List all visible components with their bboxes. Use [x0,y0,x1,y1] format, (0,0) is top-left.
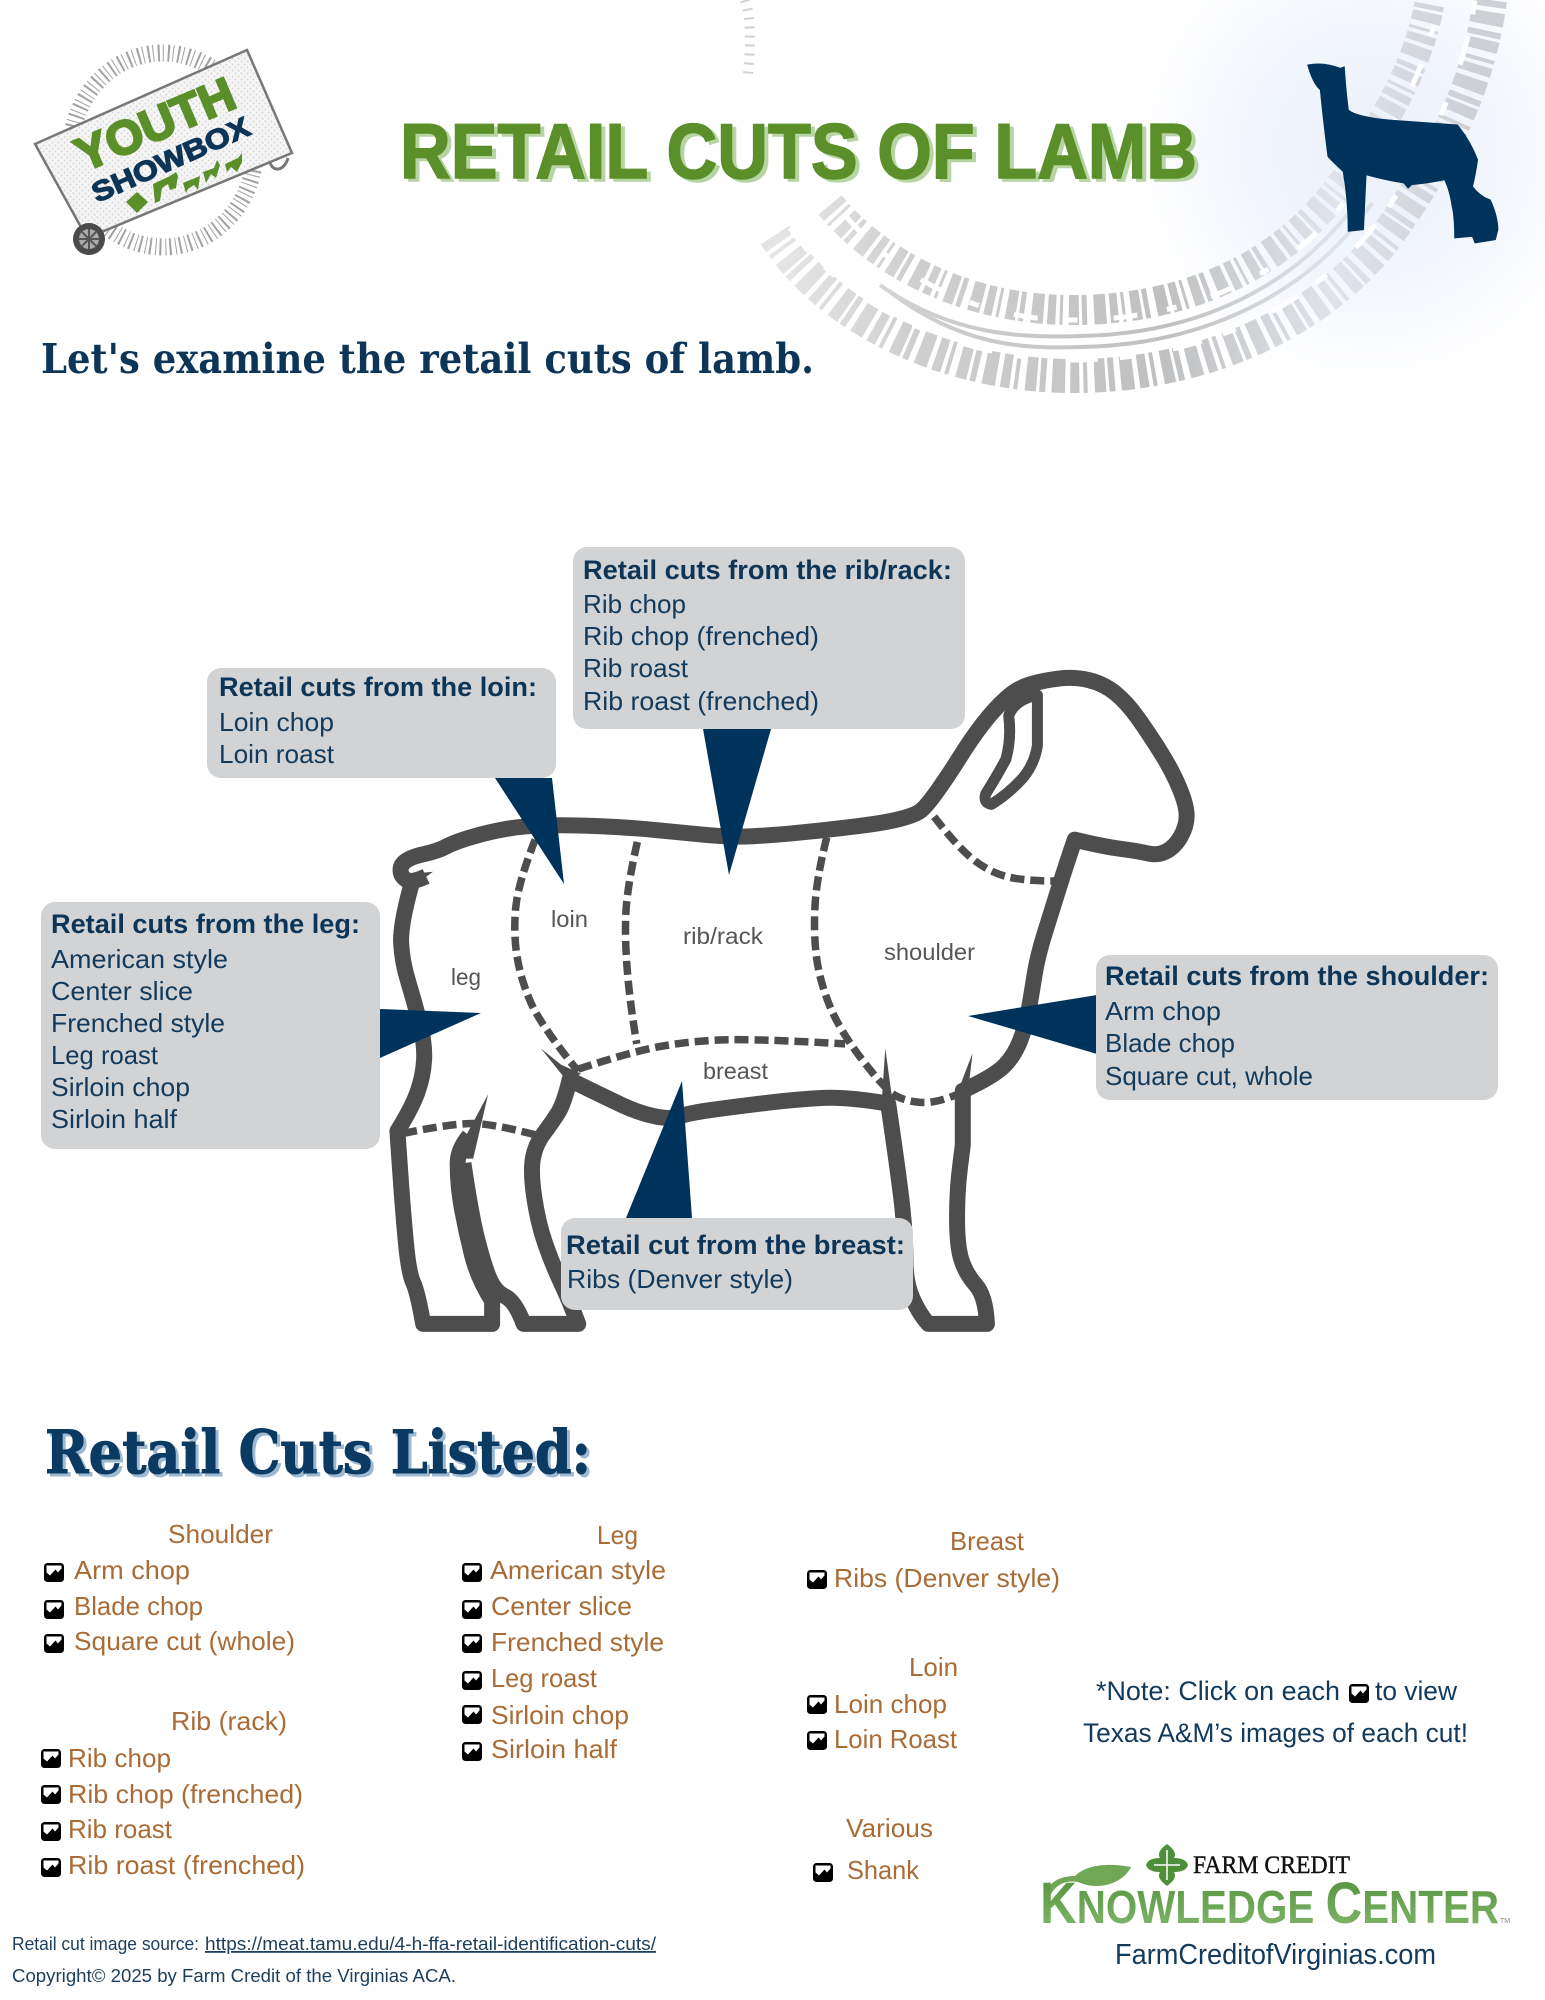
callout: leg: Center slice [51,976,193,1006]
list: loin: Loin Roast [834,1724,958,1754]
list: leg: Leg [597,1520,638,1550]
logo diamond mark [1146,1844,1188,1886]
logo sign board [35,50,292,238]
callout: breast [561,1218,913,1310]
list: loin: Loin chop [834,1689,947,1719]
list: leg: American style [490,1555,666,1585]
list: shoulder: Square cut (whole) [74,1626,295,1656]
callout: loin: Loin roast [219,739,335,769]
logo tire ring [71,53,255,247]
logo: Farm Credit Knowledge Center [1040,1844,1510,1971]
list: shoulder: Blade chop [74,1591,203,1621]
note: Texas A&M’s images of each cut! [1083,1718,1468,1748]
list: rib (rack): Rib chop [68,1743,171,1773]
heading: retail cuts listed: Retail Cuts Listed: [48,1421,594,1491]
dashed cut lines [403,817,1055,1135]
arrow: leg [380,1009,481,1058]
note [1083,1676,1468,1748]
list: leg: Frenched style [491,1627,664,1657]
logo farm credit wordmark: FARM CREDIT [1193,1852,1350,1879]
logo leaf [1044,1865,1131,1896]
logo animals [153,153,242,203]
footer: source: https://meat.tamu.edu/4-h-ffa-retail-identification-cuts/ [205,1934,656,1954]
title: RETAIL CUTS OF LAMB [400,107,1197,195]
title: RETAIL CUTS OF LAMB [404,110,1201,198]
footer: source: Retail cut image source: [12,1934,199,1954]
logo: Youth Showbox [35,50,292,255]
logo hook [270,158,288,169]
cut label: loin: loin [551,906,588,932]
list: rib (rack) [41,1706,305,1880]
callout: rib: Rib roast [583,653,689,683]
callout: shoulder: Arm chop [1105,996,1221,1026]
callout: shoulder [1096,955,1498,1100]
icon: lamb silhouette [1308,64,1498,243]
callout: loin [207,668,556,778]
subtitle: Let's examine the retail cuts of lamb. [41,335,814,383]
callout: leg [41,902,380,1149]
cut label: rib/rack: rib/rack [683,923,764,949]
callout: shoulder: Blade chop [1105,1028,1235,1058]
list: rib (rack): Rib roast (frenched) [68,1850,305,1880]
callout: leg: American style [51,944,228,974]
callout: loin: Loin chop [219,707,334,737]
footer: source [12,1934,656,1954]
callout: loin: Retail cuts from the loin: [219,672,537,702]
logo clover [126,192,148,213]
list: leg: Leg roast [491,1663,598,1693]
list: leg: Sirloin chop [491,1700,629,1730]
lamb outline [397,678,1187,1324]
logo website: FarmCreditofVirginias.com [1115,1939,1436,1971]
callout: rib [573,547,965,729]
background glow [1100,0,1545,420]
tire track decoration [745,0,1490,376]
list: breast: Breast [950,1526,1025,1556]
list: loin [807,1652,958,1754]
list: breast: Ribs (Denver style) [834,1563,1060,1593]
callout: shoulder: Square cut, whole [1105,1061,1313,1091]
list: various: Various [846,1813,933,1843]
callout: leg: Leg roast [51,1040,159,1070]
logo wheel [73,223,105,255]
callout: leg: Frenched style [51,1008,225,1038]
list: various: Shank [847,1855,920,1885]
logo knowledge center wordmark: KNOWLEDGE CENTER [1040,1871,1499,1936]
note: *Note: Click on each [1096,1676,1340,1706]
list: shoulder [44,1519,295,1656]
callout: breast: Retail cut from the breast: [566,1230,905,1260]
note: to view [1375,1676,1457,1706]
heading: retail cuts listed: Retail Cuts Listed: [45,1418,591,1488]
list: various [813,1813,933,1885]
arrow: breast [626,1081,692,1218]
list: leg: Sirloin half [491,1734,618,1764]
callout: shoulder: Retail cuts from the shoulder: [1105,961,1489,991]
list: rib (rack): Rib (rack) [171,1706,287,1736]
list: leg [462,1520,666,1764]
callout: rib: Rib roast (frenched) [583,686,819,716]
list: shoulder: Arm chop [74,1555,190,1585]
list: rib (rack): Rib chop (frenched) [68,1779,303,1809]
logo word showbox: SHOWBOX [87,111,255,208]
logo trademark: TM [1500,1918,1510,1925]
callout: rib: Retail cuts from the rib/rack: [583,555,952,585]
list: breast [807,1526,1060,1593]
callout: leg: Sirloin chop [51,1072,190,1102]
arrow: rib [703,729,771,875]
list: leg: Center slice [491,1591,632,1621]
arrow: shoulder [968,995,1097,1054]
list: rib (rack): Rib roast [68,1814,173,1844]
list: shoulder: Shoulder [168,1519,273,1549]
callout: leg: Retail cuts from the leg: [51,909,360,939]
footer: copyright: Copyright© 2025 by Farm Credit of the Virginias ACA. [12,1966,456,1986]
arrow: loin [495,778,564,884]
logo word youth: YOUTH [67,67,243,181]
callout: breast: Ribs (Denver style) [567,1264,793,1294]
callout: rib: Rib chop [583,589,686,619]
cut label: shoulder: shoulder [884,939,975,965]
cut label: leg: leg [451,964,481,990]
callout: leg: Sirloin half [51,1104,178,1134]
cut label: breast: breast [703,1058,769,1084]
lamb diagram [397,678,1187,1324]
callout: rib: Rib chop (frenched) [583,621,819,651]
list: loin: Loin [909,1652,958,1682]
